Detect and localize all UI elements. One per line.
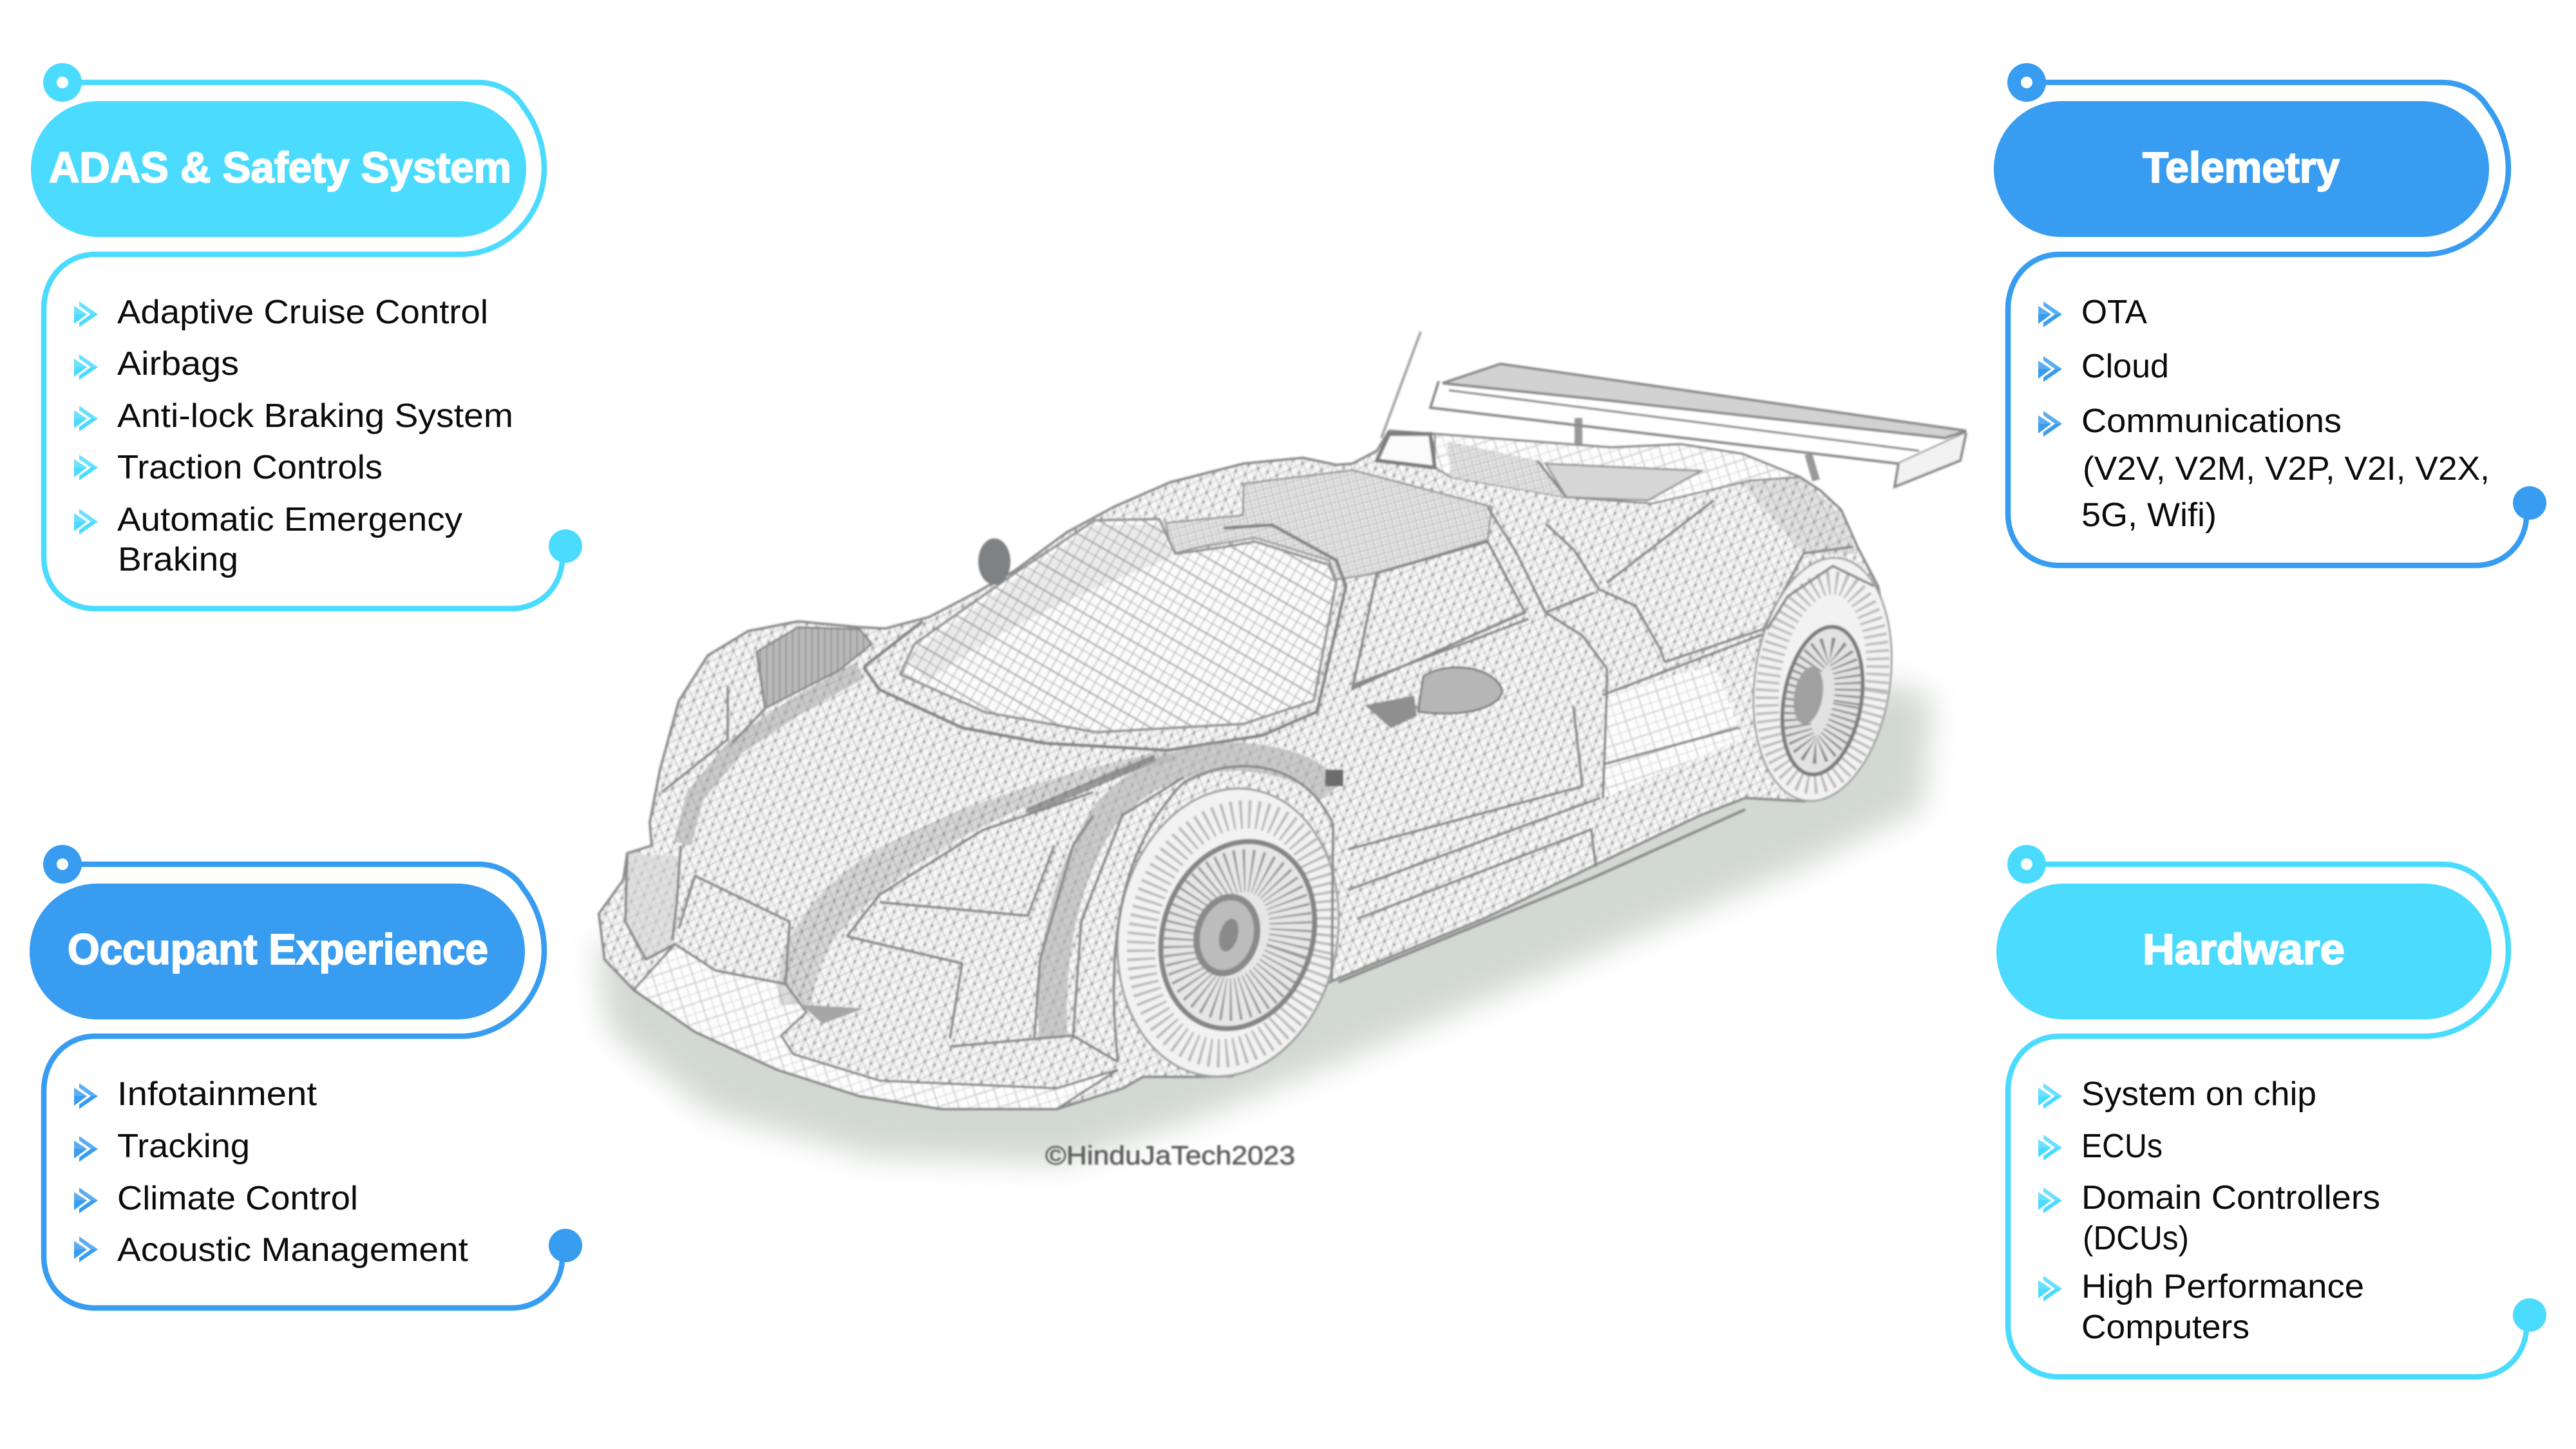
list item: Acoustic Management xyxy=(117,1231,469,1269)
front arch outline xyxy=(1114,766,1333,1062)
list item xyxy=(2038,402,2490,534)
connector outline xyxy=(2008,82,2526,565)
side window xyxy=(1352,542,1525,688)
heading: ADAS & Safety System xyxy=(49,144,511,192)
panel: ADAS & Safety System xyxy=(31,63,582,609)
car wireframe illustration xyxy=(596,332,1966,1162)
list item: OTA xyxy=(2081,294,2147,331)
list item xyxy=(2038,348,2169,385)
panel: Telemetry xyxy=(1994,63,2546,565)
panel: Occupant Experience xyxy=(30,845,582,1308)
list item xyxy=(2038,1179,2380,1257)
list item: Computers xyxy=(2081,1309,2249,1346)
list item: Domain Controllers xyxy=(2081,1179,2380,1217)
rear deck xyxy=(1435,434,1800,504)
start node xyxy=(43,63,82,102)
heading: Hardware xyxy=(2143,925,2345,974)
heading pill xyxy=(30,884,525,1019)
list item: (V2V, V2M, V2P, V2I, V2X, xyxy=(2083,450,2490,488)
heading pill xyxy=(1994,101,2489,237)
list item: (DCUs) xyxy=(2083,1220,2189,1257)
list item xyxy=(2038,294,2147,331)
list item: Infotainment xyxy=(117,1075,317,1113)
front intake xyxy=(802,1005,864,1024)
side marker xyxy=(1325,770,1343,786)
left mirror xyxy=(978,538,1010,585)
rear wheel xyxy=(1739,549,1906,810)
list item: Anti-lock Braking System xyxy=(117,397,513,435)
left hood edge xyxy=(683,670,860,844)
copyright: ©HinduJaTech2023 xyxy=(1045,1141,1295,1170)
windshield top shading xyxy=(908,525,1173,683)
list item: Braking xyxy=(118,541,238,578)
list item: ECUs xyxy=(2081,1128,2163,1165)
windshield frame line xyxy=(864,525,1346,750)
left-side deck panel xyxy=(1447,441,1566,497)
roof xyxy=(1166,470,1492,580)
connector outline xyxy=(44,864,562,1308)
windshield xyxy=(900,519,1336,732)
hood stripe xyxy=(779,750,1179,1005)
front arch band xyxy=(1052,757,1331,1037)
list item xyxy=(2038,1128,2163,1165)
end node xyxy=(549,1229,582,1262)
connector outline xyxy=(2008,864,2526,1377)
lower splitter xyxy=(634,944,1118,1109)
connector outline xyxy=(44,82,562,609)
list item: Automatic Emergency xyxy=(117,501,462,538)
end node xyxy=(2513,1298,2546,1332)
list item: Climate Control xyxy=(117,1180,358,1217)
right mirror xyxy=(1365,667,1502,728)
list item xyxy=(74,345,239,383)
list item: Cloud xyxy=(2081,348,2169,385)
left fender arch hatch xyxy=(757,627,872,708)
panel: Hardware xyxy=(1996,845,2546,1377)
rear arch xyxy=(1767,566,1874,629)
list item: System on chip xyxy=(2081,1075,2316,1113)
body silhouette xyxy=(599,431,1890,1109)
antenna xyxy=(1381,332,1421,438)
list item: 5G, Wifi) xyxy=(2081,497,2217,534)
list item: Communications xyxy=(2081,402,2342,440)
list item: Adaptive Cruise Control xyxy=(117,294,488,331)
list item: Traction Controls xyxy=(117,449,383,486)
front wheel xyxy=(1095,771,1361,1094)
list item: Tracking xyxy=(117,1128,250,1165)
start node xyxy=(2007,845,2046,884)
hood crease xyxy=(1028,758,1155,811)
end node xyxy=(549,529,582,563)
list item xyxy=(74,501,462,578)
heading: Occupant Experience xyxy=(68,925,488,974)
start node xyxy=(2007,63,2046,102)
end node xyxy=(2513,486,2546,520)
list item: Airbags xyxy=(117,345,239,383)
heading pill xyxy=(1996,884,2492,1019)
ground shadow xyxy=(596,683,1932,1162)
cockpit opening xyxy=(1377,434,1435,468)
heading: Telemetry xyxy=(2143,144,2340,192)
body lines xyxy=(625,460,1853,1062)
rear quarter shading xyxy=(1739,477,1857,554)
heading pill xyxy=(31,101,526,237)
rear window xyxy=(1546,464,1701,500)
list item: High Performance xyxy=(2081,1268,2364,1305)
start node xyxy=(43,845,82,884)
left intake xyxy=(625,853,680,960)
rear wing xyxy=(1430,364,1966,487)
list item xyxy=(2038,1268,2364,1346)
mid panel light mesh xyxy=(1603,665,1743,799)
